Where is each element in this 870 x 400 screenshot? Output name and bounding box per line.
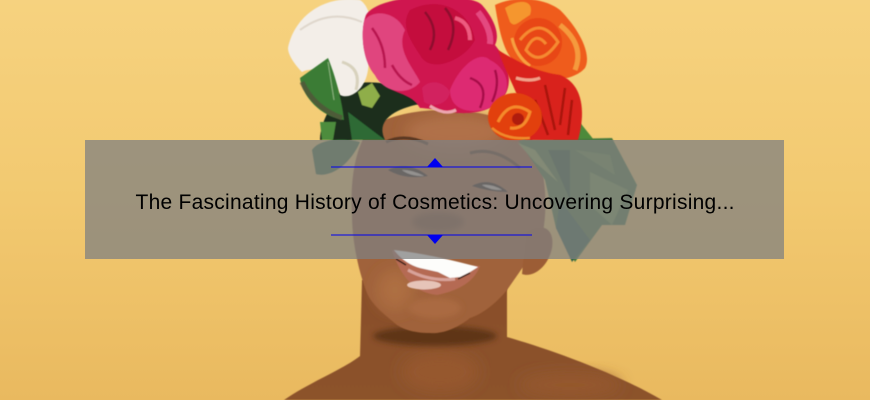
woman: eyes and nose	[386, 138, 520, 232]
flower: white peony	[288, 0, 371, 96]
top rule with up arrow	[331, 158, 532, 168]
woman: smile	[392, 250, 480, 295]
translucent grey banner	[85, 140, 784, 259]
flower: orange rose	[495, 0, 587, 80]
leaves: crown right	[518, 120, 637, 262]
flower: red dahlia	[498, 50, 582, 140]
bottom rule with down arrow	[331, 234, 532, 244]
leaf: large green	[300, 58, 344, 120]
woman: face	[352, 110, 552, 333]
woman: neck and shoulders	[284, 280, 662, 400]
title: The Fascinating History of Cosmetics: Uncovering Surprising...	[136, 191, 734, 214]
flower crown	[288, 0, 637, 262]
leaves: crown left	[312, 82, 425, 175]
flower: orange-red rose	[488, 93, 542, 141]
flower: pink peony	[363, 0, 509, 113]
